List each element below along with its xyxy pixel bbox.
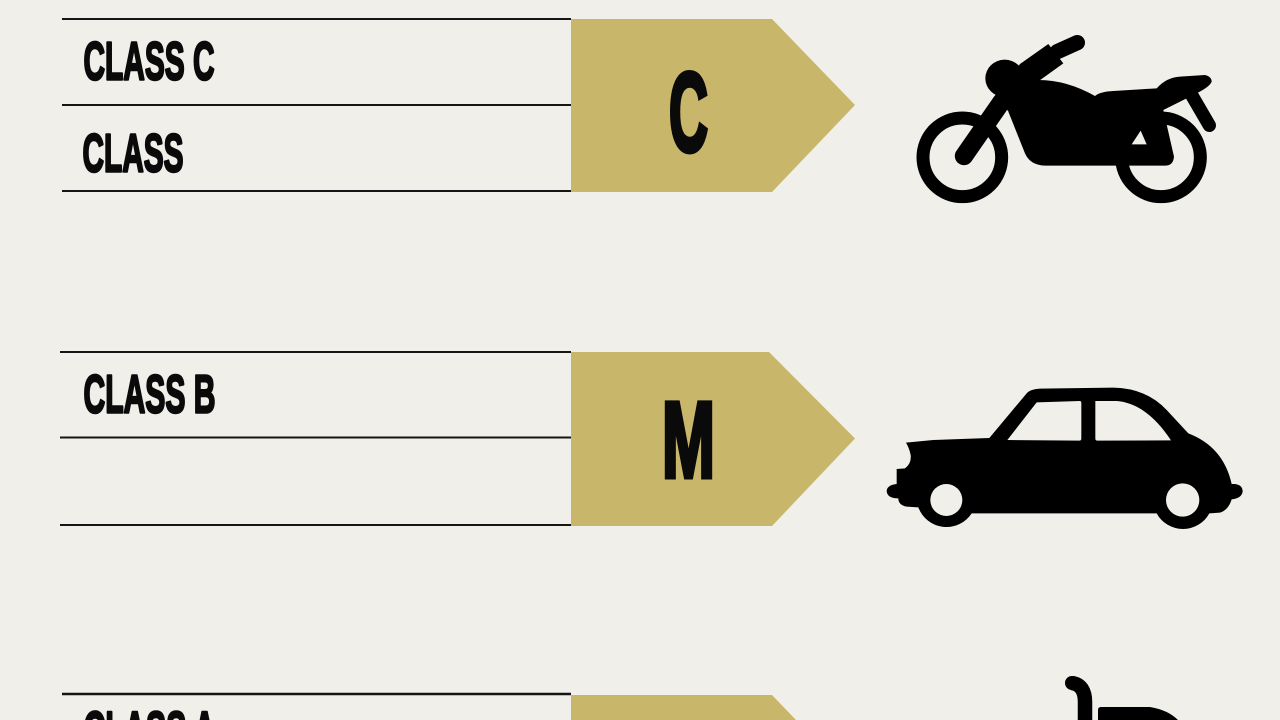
arrow: gold tag C — [571, 19, 855, 192]
icon: truck — [1065, 676, 1178, 720]
text: class label: CLASS — [82, 124, 184, 184]
arrow: gold tag — [571, 695, 796, 720]
row: class A truck (cropped) — [62, 676, 1178, 720]
row: class C motorcycle: C — [669, 50, 708, 175]
text: class B label: CLASS B — [84, 364, 216, 424]
text: tag letter M: M — [662, 379, 715, 500]
arrow: gold tag M — [571, 352, 855, 526]
row: class B car — [60, 352, 1243, 529]
icon: car — [887, 388, 1243, 529]
icon: motorcycle — [923, 43, 1212, 197]
text: class C label: CLASS C — [84, 32, 214, 92]
row: class C motorcycle — [62, 19, 1212, 197]
